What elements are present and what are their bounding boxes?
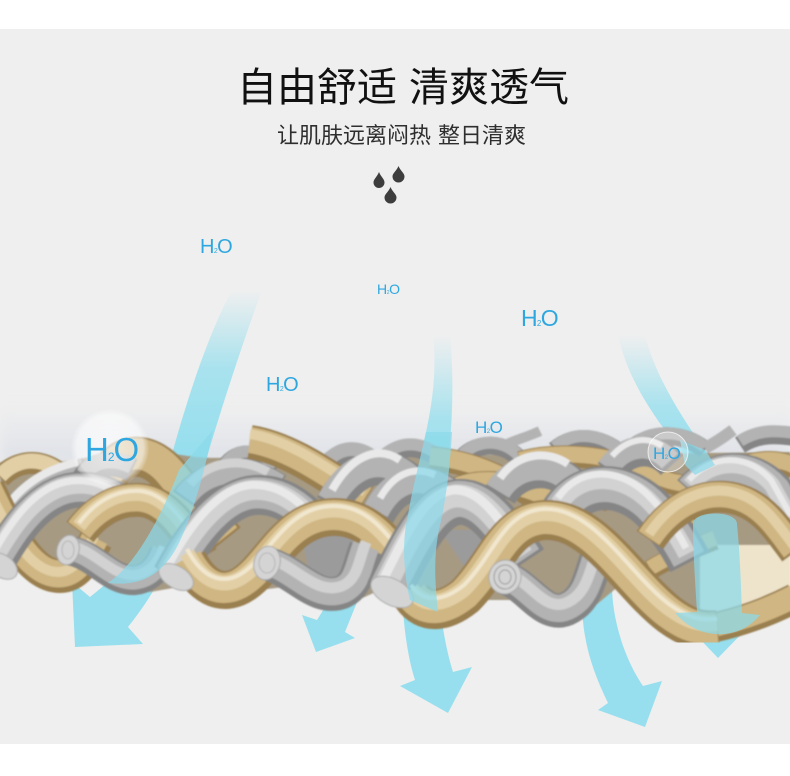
icon: water drops: [374, 166, 404, 204]
rear grey strands: [222, 430, 790, 478]
grey strand with cut end 5: [383, 490, 525, 592]
H2O labels: [200, 236, 558, 437]
front tan wave: [411, 509, 718, 630]
arrows behind fabric: [72, 290, 760, 727]
grey strand with cut end 2: [66, 491, 202, 580]
grey strand 6 foreground: [503, 571, 570, 611]
title: [237, 66, 569, 110]
arrow: far left: [72, 290, 262, 647]
subtitle: 整日清爽: [438, 123, 526, 148]
arrow overlays on fabric: [108, 430, 760, 634]
mid grey strands: [6, 440, 672, 520]
grey strand with cut end 3: [168, 485, 308, 576]
H2O bubble small: H2O: [653, 444, 681, 463]
H2O labels: H2O: [377, 281, 400, 297]
lower-left tan trough: [0, 484, 96, 576]
tan wave centre-left and grey strand 4: [187, 506, 408, 594]
grey strand 8: [689, 460, 790, 530]
tan right waves: [649, 491, 790, 630]
H2O bubble large: [71, 409, 149, 487]
hazy horizon behind fabric: [0, 405, 790, 490]
H2O labels: H2O: [521, 305, 558, 331]
H2O labels: H2O: [475, 418, 503, 437]
cut ends: [0, 533, 525, 614]
overlay: upper right arrow: [680, 440, 715, 475]
grey strand 7: [558, 474, 690, 562]
grey strand with cut end 1: [0, 481, 125, 566]
grey strand 6: [503, 542, 600, 611]
arrow: centre left: [302, 565, 372, 652]
H2O labels: H2O: [200, 236, 232, 258]
H2O bubble small: [648, 432, 688, 472]
fabric base mass: [0, 448, 790, 632]
grey gap patches: [300, 530, 530, 580]
subtitle: 让肌肤远离闷热: [277, 123, 431, 148]
fabric weave: [0, 430, 790, 632]
cream gaps: [700, 545, 790, 622]
title: 清爽透气: [409, 66, 569, 110]
overlay: far-left arrow: [108, 430, 213, 584]
overlay: centre arrow: [404, 432, 452, 612]
subtitle: [277, 123, 526, 148]
H2O labels: H2O: [266, 374, 298, 396]
overlay: right arrow: [675, 514, 760, 634]
H2O bubble large: H2O: [85, 431, 139, 468]
arrow: centre: [400, 335, 472, 713]
arrow: right: [618, 335, 760, 658]
rear tan strands: [0, 434, 790, 570]
title: 自由舒适: [237, 66, 397, 110]
arrow: centre right: [582, 585, 662, 727]
